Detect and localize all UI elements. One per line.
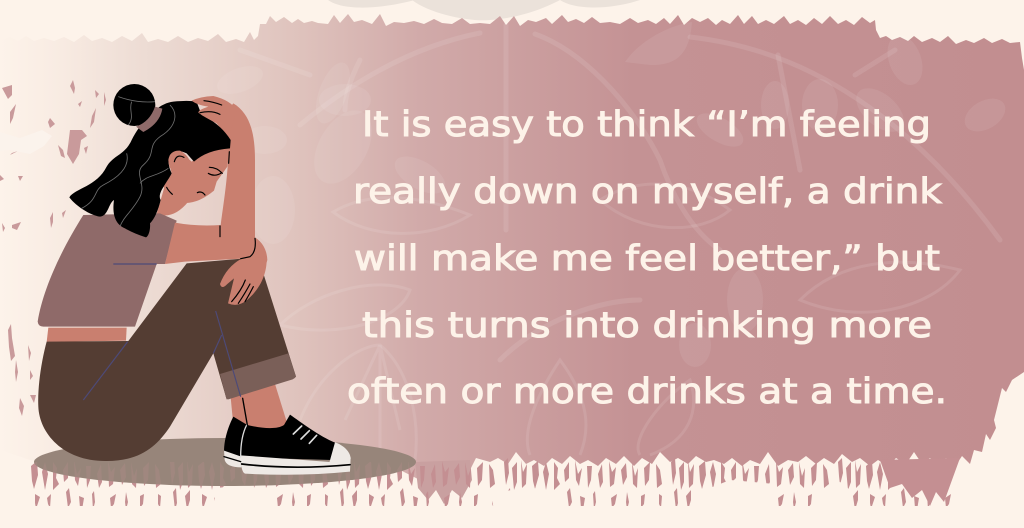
pants cuff: [220, 353, 296, 399]
dense rose brush near the ground: [415, 460, 472, 504]
front sole: [241, 455, 351, 475]
hand on knee: [220, 257, 267, 305]
front shoe: [241, 415, 335, 460]
hair bun: [113, 84, 155, 126]
pants: [38, 258, 296, 461]
main message text: really down on myself, a drink: [353, 172, 943, 212]
main message text: often or more drinks at a time.: [347, 372, 947, 412]
hair: [69, 101, 231, 237]
outlined leaves: [280, 184, 960, 460]
main message text: [347, 105, 947, 412]
leg skin: [231, 384, 287, 430]
main message text: It is easy to think “I’m feeling: [362, 105, 931, 145]
shirt: [38, 213, 177, 327]
left white brush patch: [0, 130, 52, 154]
shadow speckle overlay: [34, 462, 416, 486]
dense rose brush at lower right: [880, 458, 960, 506]
faint leaves and branches: [213, 22, 1011, 367]
top flower silhouette: [328, 0, 640, 20]
arm raised to head: [165, 103, 267, 273]
ground shadow: [34, 438, 416, 486]
face: [163, 147, 230, 203]
left speckles: [0, 80, 106, 416]
shoe details: [224, 398, 350, 467]
branches: [240, 25, 1000, 360]
hair strands: [82, 97, 175, 227]
bottom speckled brush band: [31, 458, 951, 506]
blue crease lines: [83, 264, 241, 400]
neck: [157, 185, 188, 215]
illustration: sad woman sitting: [38, 84, 351, 475]
hair band: [136, 107, 162, 132]
midriff: [47, 328, 127, 342]
main message text: this turns into drinking more: [362, 306, 932, 346]
back shoe: [224, 417, 247, 462]
main message text: will make me feel better,” but: [354, 239, 940, 279]
toe cap: [329, 442, 351, 463]
hand on head: [192, 96, 237, 133]
ear: [168, 151, 191, 173]
gaps in the speckled band: [28, 480, 953, 516]
face lines and fingers: [167, 101, 255, 303]
back sole: [224, 451, 241, 467]
